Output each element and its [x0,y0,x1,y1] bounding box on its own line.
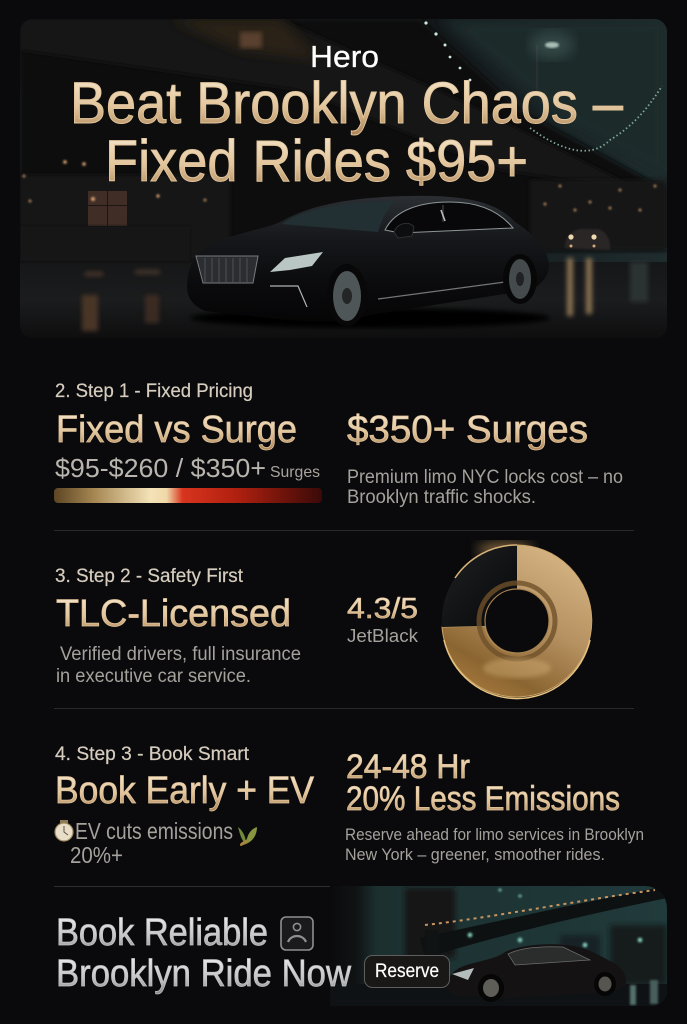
surges small label: Surges [270,464,320,481]
EV emissions text: EV cuts emissions [75,818,233,844]
step 1 label: 2. Step 1 - Fixed Pricing [55,381,253,402]
rating value: 4.3/5 [347,593,418,625]
panel: call to action [56,886,667,1006]
step 1 description: Premium limo NYC locks cost – no [347,467,623,488]
distant car [565,229,610,250]
icon: person badge [281,917,313,950]
stat: 24-48 hr: 24-48 Hr [346,748,470,786]
step 2 description: Verified drivers, full insurance [60,644,301,665]
wet road [20,262,667,338]
heading: fixed vs surge: Fixed vs Surge [56,409,297,451]
price range: $95-$260 / $350+ [55,453,266,483]
donut chart: 4.3 of 5 [442,542,592,699]
limousine [187,196,550,328]
hero label: Hero [310,39,379,74]
price gradient bar [54,488,322,503]
hero headline line 2: Fixed Rides $95+ [105,129,528,194]
step 1 description: Brooklyn traffic shocks. [347,487,536,508]
rating source: JetBlack [347,626,419,646]
step 2 description: in executive car service. [56,666,251,687]
bridge cable lights [530,86,662,151]
panel: hero [20,19,667,338]
step 3 description: Reserve ahead for limo services in Brooklyn [345,825,644,844]
icon: leaf [238,827,257,846]
CTA limousine [447,944,626,1002]
step 3 description: New York – greener, smoother rides. [345,845,605,864]
stat: 20% less emissions: 20% Less Emissions [346,780,620,818]
panel: step 1 fixed pricing [54,381,623,508]
panel: step 3 book smart [55,744,644,868]
icon: stopwatch [55,820,73,841]
CTA headline line 2: Brooklyn Ride Now [56,953,351,995]
EV emissions text: 20%+ [70,842,123,868]
hero headline line 1: Beat Brooklyn Chaos – [70,71,624,136]
step 2 label: 3. Step 2 - Safety First [55,566,244,587]
heading: TLC-licensed: TLC-Licensed [56,593,291,635]
heading: book early + EV: Book Early + EV [55,770,315,812]
CTA night bridge photo [330,886,667,1006]
panel: step 2 safety first [55,542,592,699]
stat: $350+ surges: $350+ Surges [347,409,588,451]
reserve button: Reserve [375,961,439,982]
hero night scene photo [20,19,667,338]
CTA headline line 1: Book Reliable [56,912,268,954]
step 3 label: 4. Step 3 - Book Smart [55,744,250,765]
reserve button [364,956,450,988]
